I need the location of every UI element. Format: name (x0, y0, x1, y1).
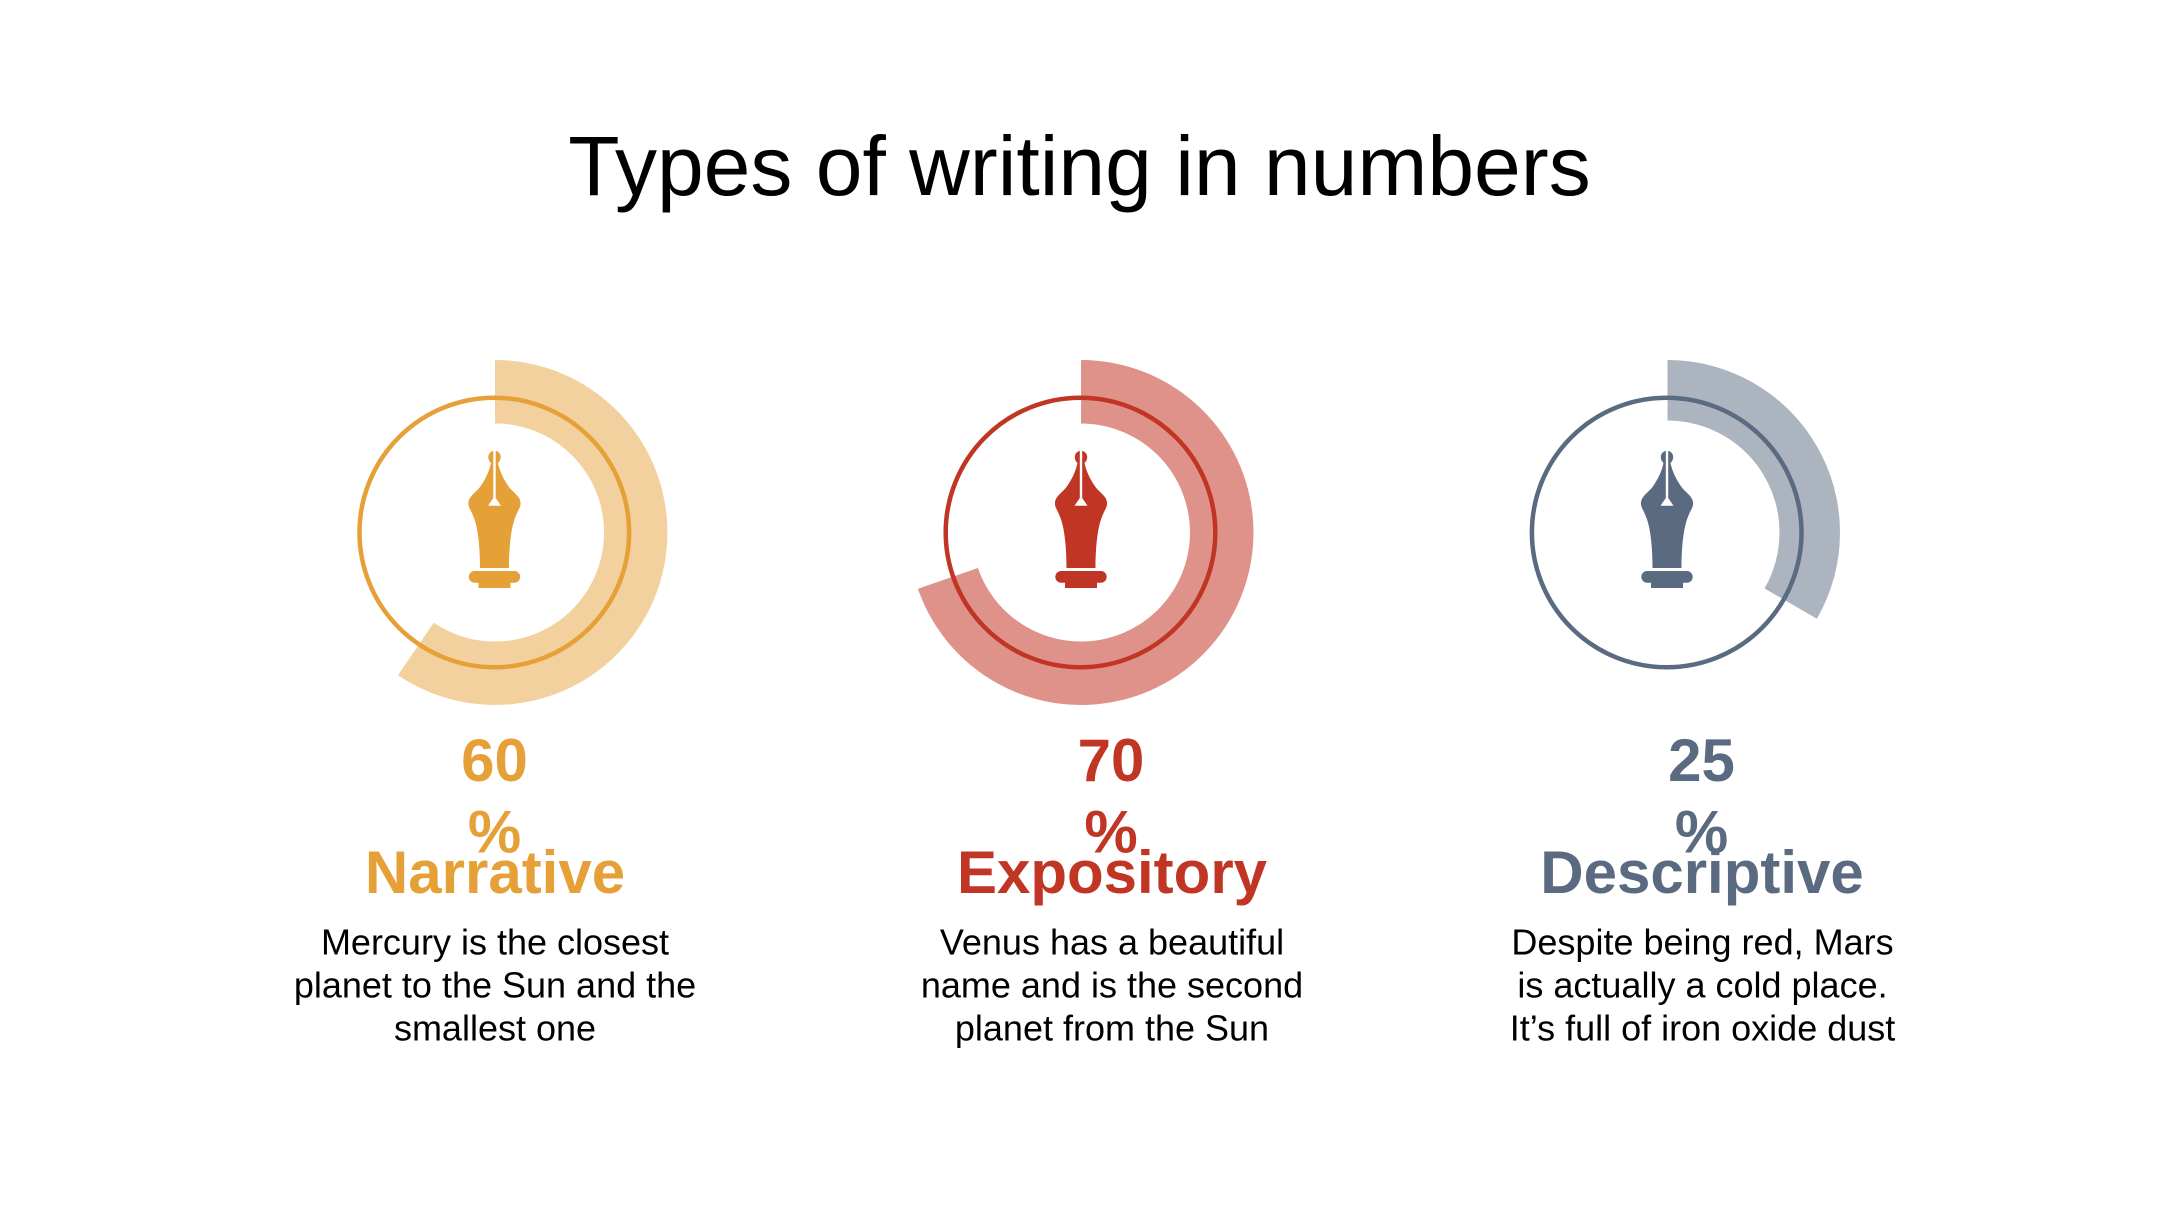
heading: Narrative: Narrative (365, 839, 625, 906)
icon: pen nib (1641, 450, 1693, 588)
percentage: 70%: 70 (1078, 727, 1144, 794)
icon: pen nib (1055, 450, 1107, 588)
panel: narrative (294, 360, 696, 1048)
panel: expository (918, 360, 1303, 1048)
percentage: 25%: 25 (1668, 727, 1735, 794)
description: Mars: Despite being red, Mars (1511, 922, 1894, 962)
description: Mercury: planet to the Sun and the (294, 964, 696, 1006)
panel: descriptive (1510, 360, 1895, 1048)
donut arc: 60% (398, 360, 667, 705)
heading: Descriptive: Descriptive (1540, 839, 1864, 906)
description: Venus: name and is the second (921, 964, 1303, 1006)
description: Mercury: Mercury is the closest (321, 922, 669, 962)
description: Mercury: smallest one (394, 1008, 596, 1048)
percentage: 25%: % (1675, 798, 1728, 866)
donut arc: 70% (918, 360, 1253, 705)
description: Venus: planet from the Sun (955, 1008, 1269, 1048)
description: Mars: is actually a cold place. (1517, 964, 1888, 1006)
description: Venus: Venus has a beautiful (940, 922, 1284, 962)
percentage: 70%: % (1084, 798, 1138, 866)
description: Mars: It’s full of iron oxide dust (1510, 1008, 1895, 1048)
icon: pen nib (468, 450, 521, 588)
percentage: 60%: 60 (461, 727, 528, 794)
donut arc: 25% (1668, 360, 1840, 619)
ring outline (360, 398, 629, 667)
ring outline (946, 398, 1215, 667)
ring outline (1532, 398, 1801, 667)
percentage: 60%: % (468, 798, 521, 866)
heading: Expository: Expository (957, 839, 1268, 906)
title: Types of writing in numbers (568, 119, 1591, 213)
